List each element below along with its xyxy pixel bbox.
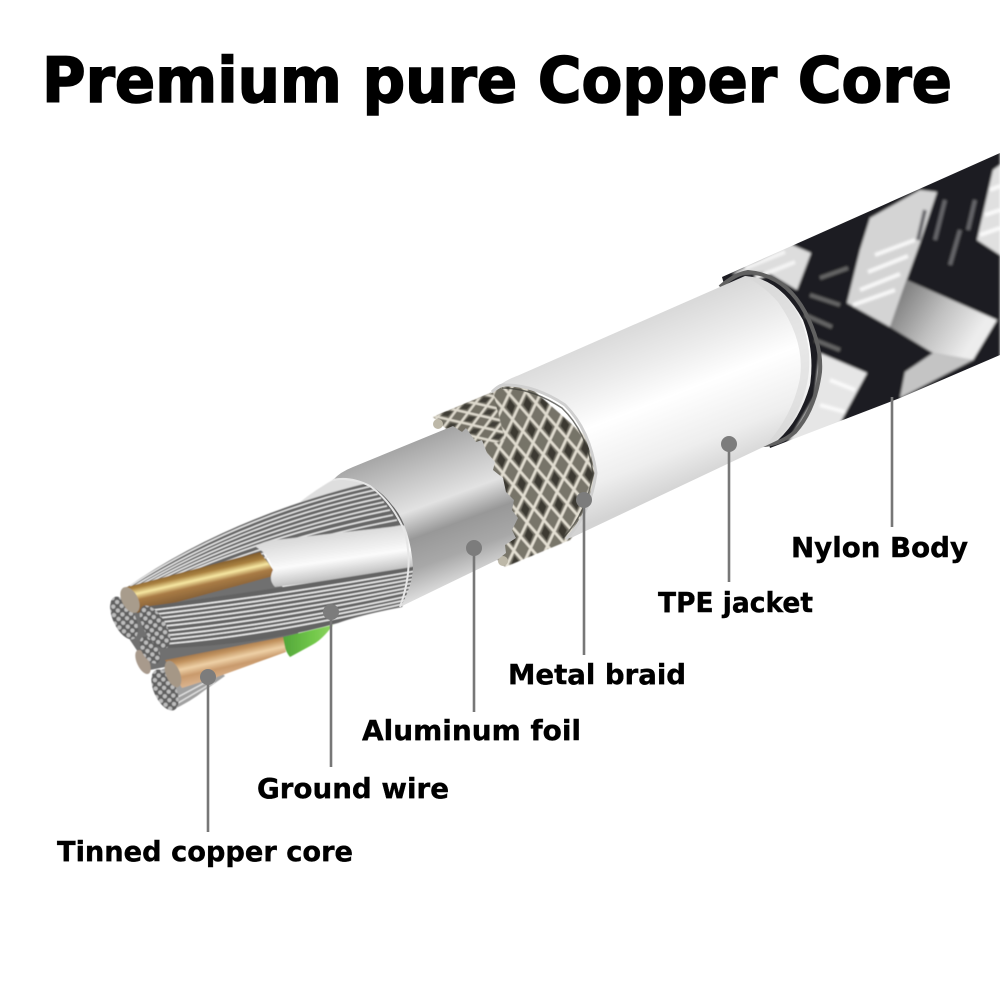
illustration: cable cross-section [57,140,1000,868]
green insulation [283,625,333,657]
ground wire strand [133,566,418,653]
lower tinned strand [146,655,225,715]
strands behind the conductors [118,548,300,670]
callout: Ground wire [257,604,449,805]
metal braid [433,376,600,567]
aluminum foil [333,426,518,607]
TPE jacket [490,276,811,539]
tinned strands: upper bundle [123,480,412,600]
callout: Aluminum foil: Aluminum foil [362,714,581,747]
wire bundles [104,478,420,715]
callout: Metal braid: Metal braid [508,658,686,691]
nylon body [722,153,1000,448]
white sheath wedge [300,478,375,502]
small copper end [132,648,154,676]
callout: TPE jacket: TPE jacket [658,586,813,619]
callout: Tinned copper core: Tinned copper core [57,835,353,868]
callout: Aluminum foil [362,540,581,747]
white insulated wire [256,524,420,587]
title: Premium pure Copper Core [42,44,952,117]
copper conductor: lower [161,637,286,690]
callout: Ground wire: Ground wire [257,772,449,805]
hex strand end: left [104,593,144,643]
hex strand end: middle [136,633,164,667]
copper conductor: upper [116,552,277,616]
callout: Metal braid [508,492,686,691]
nylon ring edge [720,272,820,445]
callout: TPE jacket [658,436,813,619]
callout: Tinned copper core [57,669,353,868]
callout: Nylon Body: Nylon Body [791,531,968,564]
